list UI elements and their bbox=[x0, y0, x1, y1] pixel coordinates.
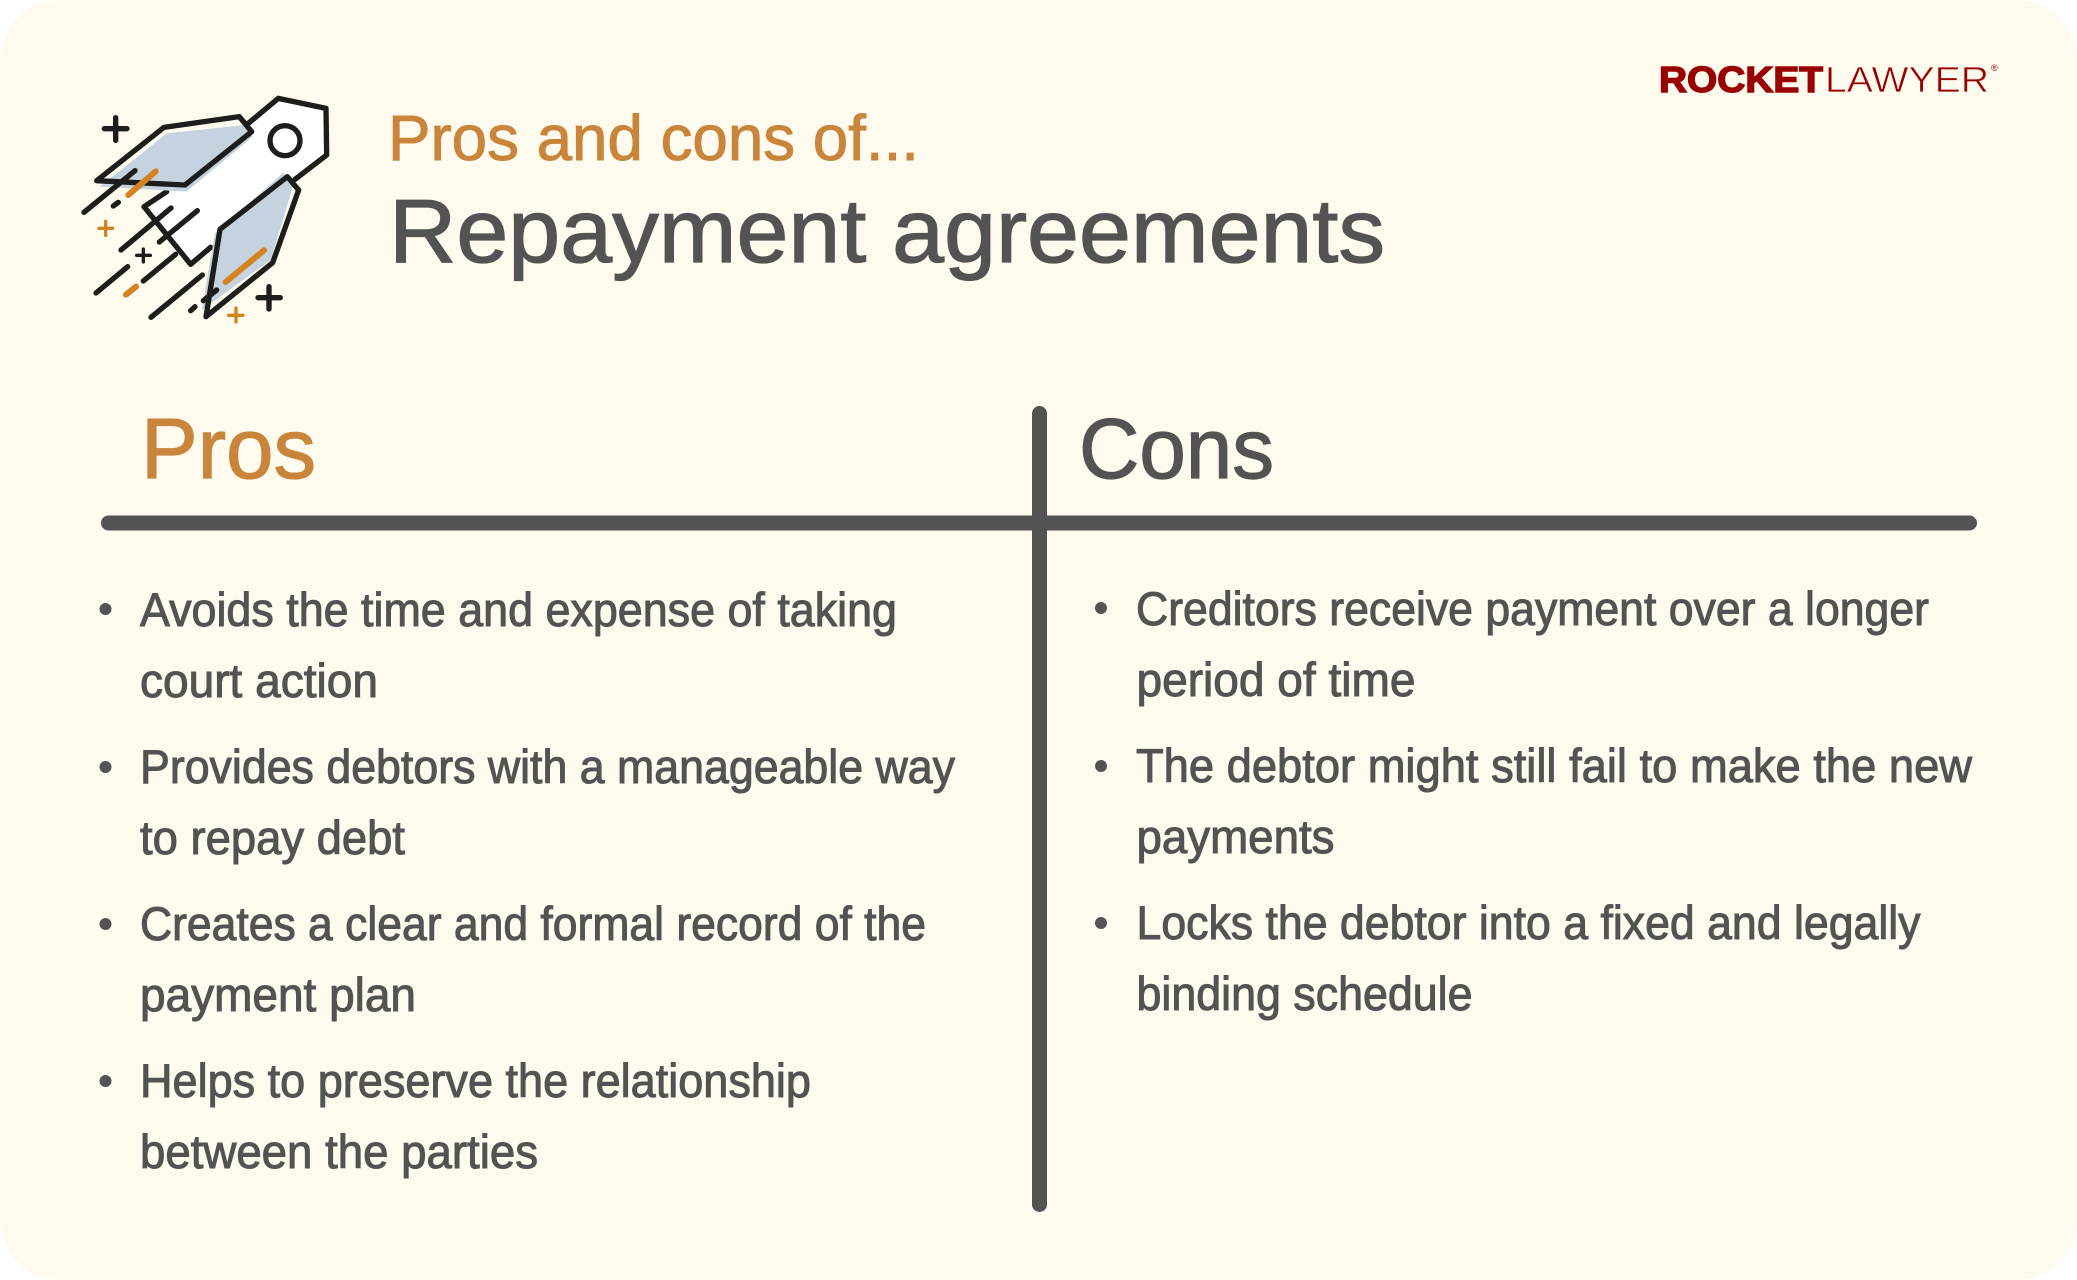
pro item 2 bbox=[100, 740, 955, 864]
subtitle: Pros and cons of... bbox=[388, 102, 919, 174]
con item 3: binding schedule bbox=[1136, 967, 1472, 1020]
con item 2: payments bbox=[1136, 810, 1334, 863]
pro item 1: court action bbox=[140, 654, 378, 707]
divider: vertical rule bbox=[1032, 406, 1047, 1212]
con item 2: The debtor might still fail to make the new bbox=[1136, 739, 1973, 792]
pro item 3: Creates a clear and formal record of the bbox=[140, 897, 926, 950]
pro item 3 bbox=[100, 897, 926, 1021]
con item 1 bbox=[1095, 582, 1929, 706]
logo: Rocket Lawyer: ® bbox=[1991, 63, 1998, 73]
pro item 2: Provides debtors with a manageable way bbox=[140, 740, 955, 793]
pro item 1 bbox=[100, 583, 897, 707]
pro item 2: to repay debt bbox=[140, 811, 405, 864]
list: cons bbox=[1095, 582, 1973, 1020]
logo: Rocket Lawyer: LAWYER bbox=[1825, 59, 1989, 100]
con item 3: Locks the debtor into a fixed and legally bbox=[1136, 896, 1921, 949]
con item 1: period of time bbox=[1136, 653, 1416, 706]
con item 1: Creditors receive payment over a longer bbox=[1136, 582, 1929, 635]
pro item 4 bbox=[100, 1054, 811, 1178]
heading: Pros: Pros bbox=[141, 402, 316, 497]
divider: horizontal rule bbox=[101, 516, 1977, 530]
icon: rocket bbox=[84, 98, 327, 322]
pro item 3: payment plan bbox=[140, 968, 416, 1021]
list: pros bbox=[100, 583, 955, 1178]
logo: Rocket Lawyer bbox=[1659, 59, 1998, 100]
heading: Cons: Cons bbox=[1079, 402, 1274, 497]
title: Repayment agreements bbox=[389, 182, 1385, 282]
pro item 4: Helps to preserve the relationship bbox=[140, 1054, 811, 1107]
pro item 1: Avoids the time and expense of taking bbox=[140, 583, 897, 636]
logo: Rocket Lawyer: ROCKET bbox=[1659, 59, 1823, 100]
pro item 4: between the parties bbox=[140, 1125, 538, 1178]
con item 3 bbox=[1095, 896, 1921, 1020]
con item 2 bbox=[1095, 739, 1973, 863]
